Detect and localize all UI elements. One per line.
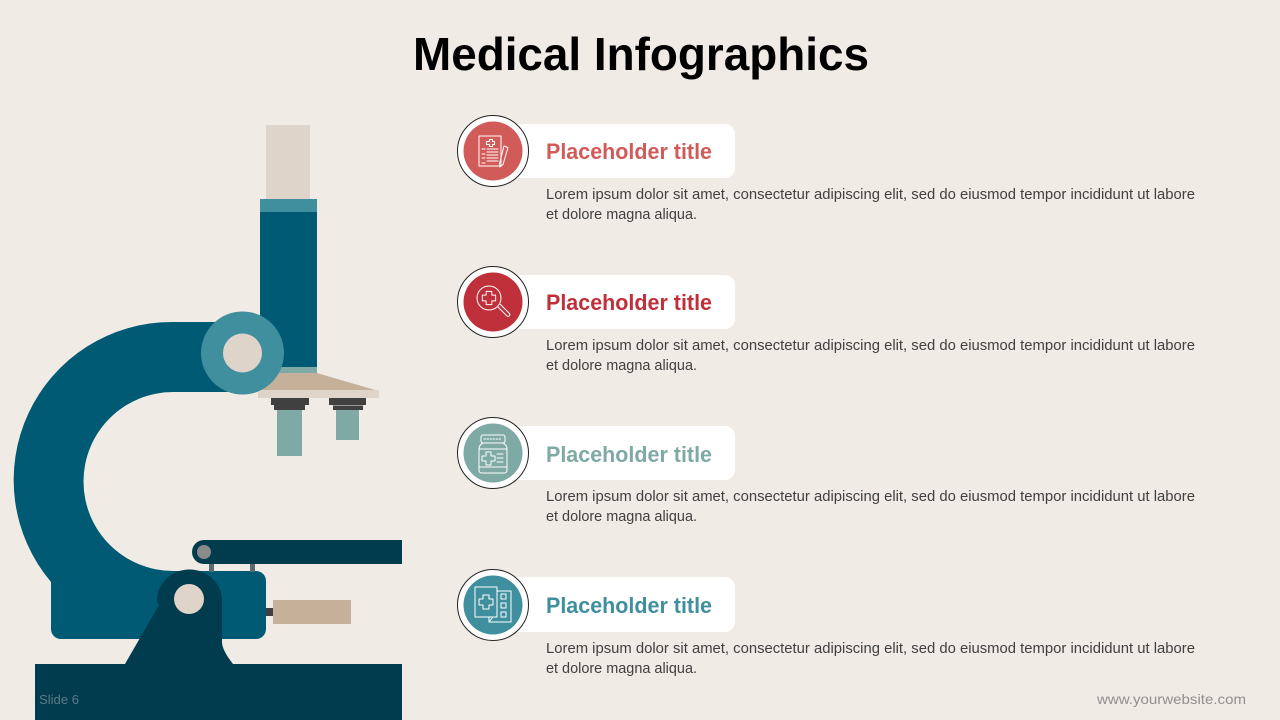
body text 3: et dolore magna aliqua.	[546, 508, 697, 525]
eyepiece	[266, 125, 310, 199]
title pill 1	[500, 124, 735, 178]
item 3	[458, 418, 1195, 525]
curved arm	[14, 322, 266, 639]
icon badge: medical chart	[458, 570, 528, 640]
body text 2	[546, 337, 1195, 374]
stage supports	[209, 563, 255, 572]
microscope tube	[260, 199, 317, 373]
body text 3: Lorem ipsum dolor sit amet, consectetur adipiscing elit, sed do eiusmod tempor incididunt ut labore	[546, 488, 1195, 505]
body text 4: Lorem ipsum dolor sit amet, consectetur adipiscing elit, sed do eiusmod tempor incididunt ut labore	[546, 640, 1195, 657]
body text 1	[546, 186, 1195, 223]
body text 1: Lorem ipsum dolor sit amet, consectetur adipiscing elit, sed do eiusmod tempor incididunt ut labore	[546, 186, 1195, 203]
item 1	[458, 116, 1195, 223]
title pill 2	[500, 275, 735, 329]
title 3: Placeholder title	[546, 442, 712, 467]
slide number: Slide 6	[39, 692, 79, 707]
body text 2: Lorem ipsum dolor sit amet, consectetur adipiscing elit, sed do eiusmod tempor incididunt ut labore	[546, 337, 1195, 354]
title 2: Placeholder title	[546, 290, 712, 315]
body text 4	[546, 640, 1195, 677]
body text 1: et dolore magna aliqua.	[546, 206, 697, 223]
icon badge: medicine bottle	[458, 418, 528, 488]
title pill 3	[500, 426, 735, 480]
title 4: Placeholder title	[546, 593, 712, 618]
base	[35, 664, 402, 720]
title: Medical Infographics	[413, 28, 869, 80]
icon badge: magnifier	[458, 266, 528, 338]
body text 4: et dolore magna aliqua.	[546, 660, 697, 677]
website url: www.yourwebsite.com	[1096, 691, 1246, 707]
pillar	[125, 570, 233, 664]
item 4	[458, 570, 1195, 677]
title 1: Placeholder title	[546, 139, 712, 164]
title pill 4	[500, 577, 735, 632]
icon badge: medical report	[458, 116, 528, 186]
right objective lens	[329, 398, 366, 440]
microscope illustration	[14, 125, 402, 720]
left objective lens	[271, 398, 309, 456]
pillar bolt	[174, 584, 204, 614]
body text 3	[546, 488, 1195, 525]
item 2	[458, 266, 1195, 374]
focus knob	[266, 600, 351, 624]
nosepiece	[250, 373, 379, 398]
pivot joint	[201, 312, 284, 394]
stage	[192, 540, 402, 564]
body text 2: et dolore magna aliqua.	[546, 357, 697, 374]
stage clip	[197, 545, 211, 559]
